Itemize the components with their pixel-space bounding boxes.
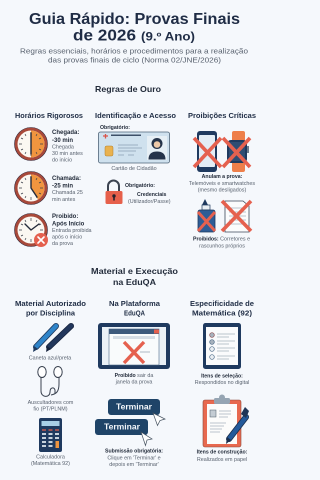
- heading: Proibições Críticas: Proibições Críticas: [188, 111, 256, 120]
- icon: clock 30 min: [14, 128, 48, 160]
- icon: crossed draft paper: [222, 201, 251, 232]
- icon: crossed corrector bottle: [198, 199, 215, 232]
- column: Material Autorizado: [15, 299, 87, 467]
- caption: Submissão obrigatória: [105, 448, 163, 468]
- heading: Material Autorizado por Disciplina: por Disciplina: [26, 308, 76, 318]
- text: credentials: Obrigatório:: [125, 183, 155, 189]
- text: Proibido: Entrada proibida: [52, 228, 92, 234]
- caption: Cartão de Cidadão: Cartão de Cidadão: [111, 166, 157, 172]
- caption: Submissão obrigatória: Submissão obrigatória:: [105, 448, 163, 454]
- column: Identificação e Acesso: [95, 111, 177, 205]
- text: Proibido: [52, 214, 92, 247]
- text: Proibidos: [193, 236, 250, 250]
- icon: tablet with blocked window: [98, 323, 170, 369]
- text: Chegada: 30 min antes: [52, 151, 83, 157]
- column: Especificidade de Matemática: [190, 299, 254, 463]
- text: Anulam a prova: Telemóveis e smartwatches: [189, 181, 255, 187]
- caption: Proibido sair: Proibido sair da: [115, 373, 153, 379]
- title: Guia Rápido: Provas Finais: [29, 11, 240, 28]
- caption: Itens de construção: [197, 450, 248, 463]
- heading: Na Plataforma EduQA: [109, 299, 161, 318]
- caption: Calculadora: [31, 454, 70, 467]
- caption: Itens de seleção: Itens de seleção:: [201, 374, 243, 380]
- text: Chegada: [52, 130, 83, 164]
- text: Proibido: após o início: [52, 234, 82, 240]
- text: Chamada: min antes: [52, 197, 76, 203]
- heading: Material Autorizado por Disciplina: [15, 299, 87, 318]
- icon: wired earphones: [38, 366, 62, 396]
- heading: Material Autorizado por Disciplina: Material Autorizado: [15, 299, 87, 308]
- caption: Proibido sair: janela da prova: [115, 380, 152, 386]
- text: Proibido: Após Início: [52, 222, 85, 228]
- caption: Proibido sair: [115, 373, 153, 386]
- icon: clipboard with pen: [203, 394, 249, 447]
- icon: clock with forbidden badge: [14, 214, 48, 247]
- text: Proibido: da prova: [52, 241, 73, 247]
- label: Obrigatório: Obrigatório:: [100, 125, 130, 131]
- column: Proibições Críticas: [188, 111, 256, 250]
- icon: cursor bottom: [141, 432, 152, 446]
- caption: Auscultadores: [28, 400, 74, 412]
- caption: Itens de seleção: [195, 374, 249, 386]
- title: de 2026: [73, 28, 136, 44]
- caption: Itens de construção: Itens de construção:: [197, 450, 248, 456]
- caption: Calculadora: Calculadora: [36, 454, 65, 460]
- text: credentials: [125, 183, 171, 205]
- column: Horários Rigorosos: [14, 111, 92, 247]
- text: Chegada: Chegada: [52, 144, 74, 150]
- icon: crossed phone: [194, 131, 221, 172]
- caption: Auscultadores: Auscultadores com: [28, 400, 74, 406]
- text: Chamada: Chamada:: [52, 176, 81, 182]
- icon: calculator: [39, 418, 62, 452]
- subtitle: Regras essenciais, horários e procedimentos para a realização: [20, 46, 248, 56]
- heading: Material e Execução na EduQA: Material e Execução: [91, 266, 178, 276]
- icon: pens: [33, 326, 71, 352]
- icon: crossed smartwatch: [223, 131, 250, 172]
- heading: Especificidade de Matemática (92): Especificidade de: [190, 299, 254, 308]
- heading: Regras de Ouro: Regras de Ouro: [95, 84, 161, 94]
- icon: tablet with checklist: [203, 323, 241, 369]
- heading: Na Plataforma EduQA: Na Plataforma: [109, 299, 161, 308]
- button: Terminar top: Terminar: [116, 402, 153, 412]
- text: Chamada: Chamada 25: [52, 190, 83, 196]
- text: Chamada: [52, 176, 83, 203]
- text: Proibidos: rascunhos próprios: [199, 244, 245, 250]
- text: Anulam a prova: Anulam a prova:: [202, 174, 243, 180]
- icon: padlock: [106, 181, 122, 204]
- icon: citizen card: [98, 132, 170, 163]
- title: (9.º Ano): [141, 32, 195, 44]
- heading: Especificidade de Matemática (92): [190, 299, 254, 318]
- text: Chegada: Chegada:: [52, 130, 79, 136]
- button: Terminar top: [108, 399, 160, 415]
- heading: Na Plataforma EduQA: EduQA: [124, 308, 145, 318]
- text: credentials: Credenciais: [137, 192, 167, 198]
- caption: Itens de seleção: Respondidos no digital: [195, 380, 249, 386]
- heading: Material e Execução na EduQA: [91, 266, 178, 287]
- caption: Itens de construção: Realizados em papel: [197, 457, 247, 463]
- text: Chegada: do início: [52, 158, 72, 164]
- text: Anulam a prova: (mesmo desligados): [198, 188, 246, 194]
- button: Terminar bottom: [95, 419, 148, 435]
- caption: Auscultadores: fio (PT/PLNM): [33, 406, 68, 412]
- text: Proibidos: Proibidos: Corretores e: [193, 236, 250, 242]
- icon: clock 25 min: [14, 172, 48, 204]
- caption: Submissão obrigatória: depois em 'Terminar': [109, 462, 159, 468]
- heading: Especificidade de Matemática (92): Matemática (92): [192, 308, 253, 318]
- button: Terminar bottom: Terminar: [104, 422, 141, 432]
- caption: Calculadora: (Matemática 92): [31, 461, 70, 467]
- column: Na Plataforma EduQA: [95, 299, 170, 468]
- text: Proibido: Proibido:: [52, 214, 78, 220]
- heading: Identificação e Acesso: Identificação e Acesso: [95, 111, 177, 120]
- heading: Horários Rigorosos: Horários Rigorosos: [15, 111, 83, 120]
- caption: Caneta azul/preta: Caneta azul/preta: [29, 356, 71, 362]
- text: Chamada: -25 min: [52, 184, 73, 190]
- subtitle: [20, 46, 248, 64]
- heading: Material e Execução na EduQA: na EduQA: [113, 277, 156, 287]
- text: Anulam a prova: [189, 174, 255, 194]
- text: credentials: (Utilizador/Passe): [128, 199, 171, 205]
- text: Chegada: -30 min: [52, 138, 73, 144]
- caption: Submissão obrigatória: Clique em 'Terminar' e: [107, 456, 161, 462]
- subtitle: das provas finais de ciclo (Norma 02/JNE/2026): [48, 56, 221, 64]
- icon: cursor top: [153, 413, 165, 426]
- title: [29, 11, 240, 44]
